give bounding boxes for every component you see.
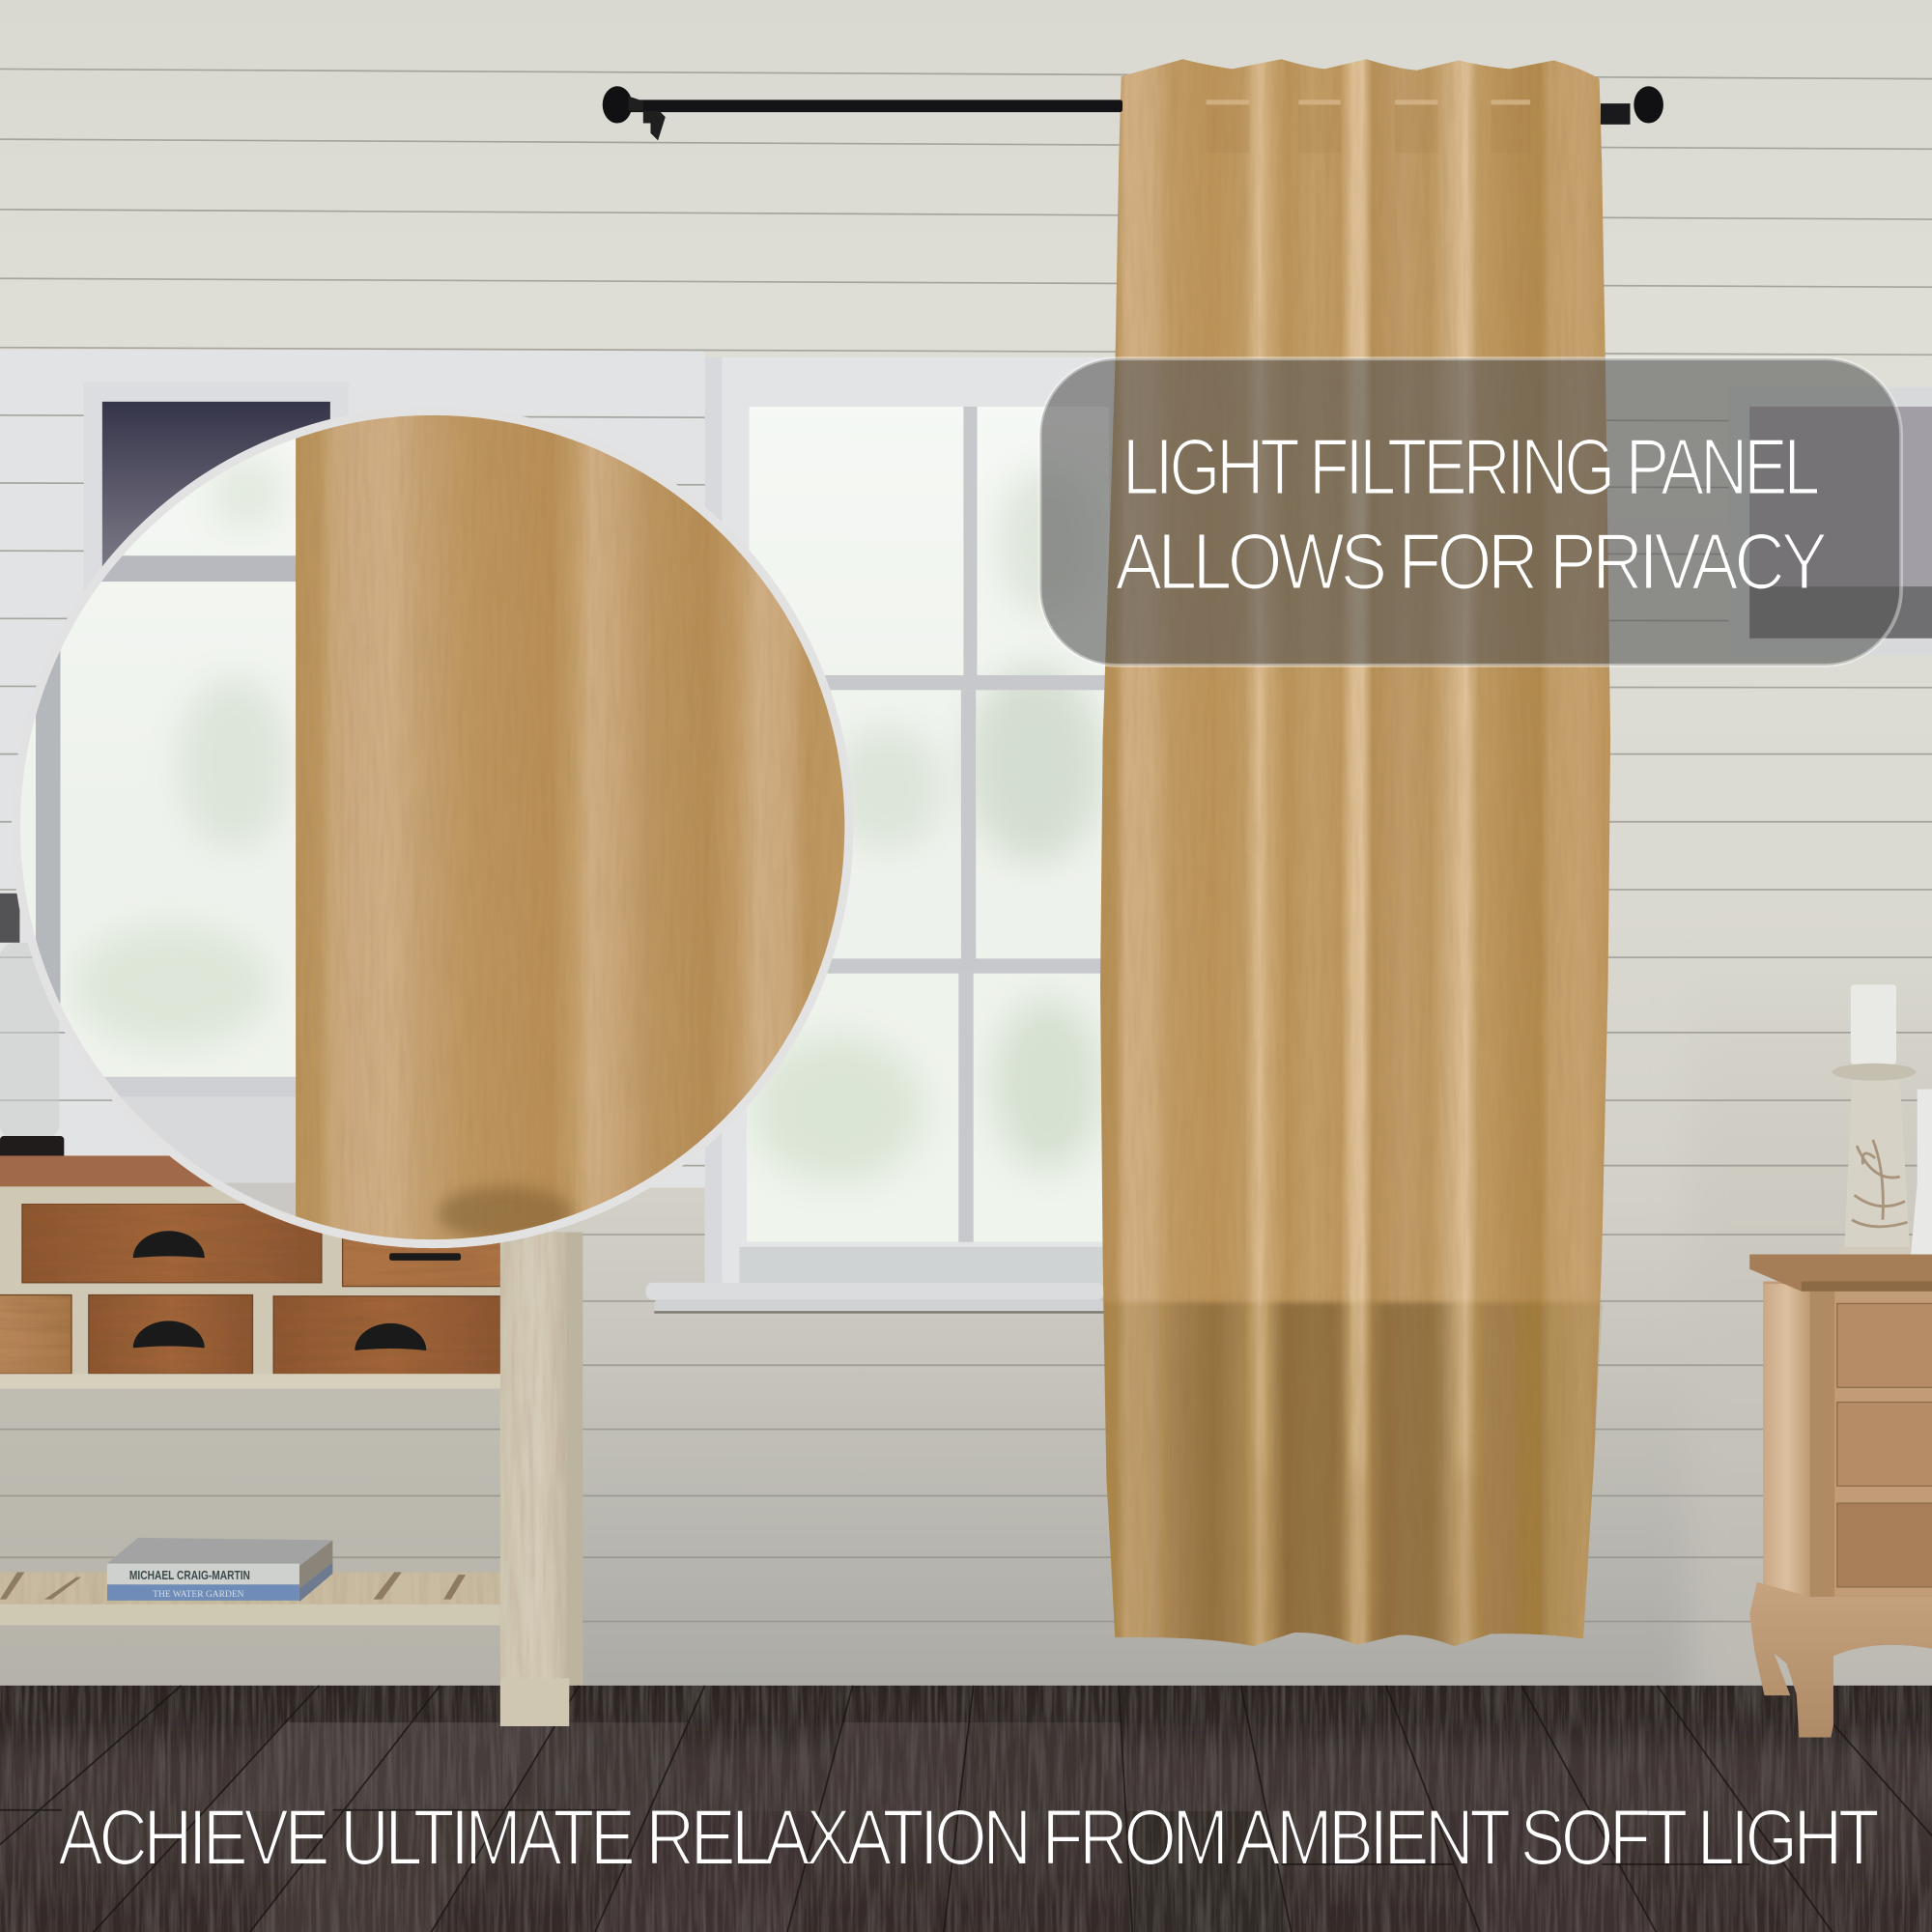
window	[645, 357, 1113, 1314]
right cabinet	[1749, 1254, 1932, 1737]
table leg	[500, 1233, 569, 1726]
window glass	[739, 397, 1109, 1252]
curtain header tabs	[1207, 99, 1530, 153]
curtain hem shading	[1091, 1302, 1620, 1663]
books: THE WATER GARDEN	[153, 1589, 244, 1600]
cabinet drawers	[1837, 1303, 1932, 1587]
glass dome on console	[0, 894, 64, 1161]
books: MICHAEL CRAIG-MARTIN	[129, 1568, 250, 1582]
callout text	[1115, 421, 1827, 607]
circle curtain close-up	[296, 401, 863, 1263]
privacy callout	[1040, 358, 1901, 666]
curtain panel	[1091, 59, 1620, 1663]
shelf	[0, 1573, 500, 1605]
curtain rod	[603, 86, 1663, 140]
white vase	[1910, 1090, 1932, 1265]
table leg foot over floor	[500, 1678, 569, 1726]
callout text: ALLOWS FOR PRIVACY	[1115, 517, 1827, 607]
console table	[0, 1155, 582, 1726]
right picture frame	[1729, 387, 1932, 656]
circle window scene	[36, 467, 296, 1216]
candle and holder	[1833, 984, 1916, 1262]
books	[107, 1538, 332, 1602]
drawers	[0, 1204, 508, 1377]
zoom circle	[0, 394, 863, 1263]
window sill	[645, 1283, 1104, 1300]
picture frame left	[84, 382, 349, 604]
drawer handles	[133, 1231, 461, 1350]
window mullions	[747, 407, 1113, 1242]
floor	[0, 1686, 1932, 1932]
